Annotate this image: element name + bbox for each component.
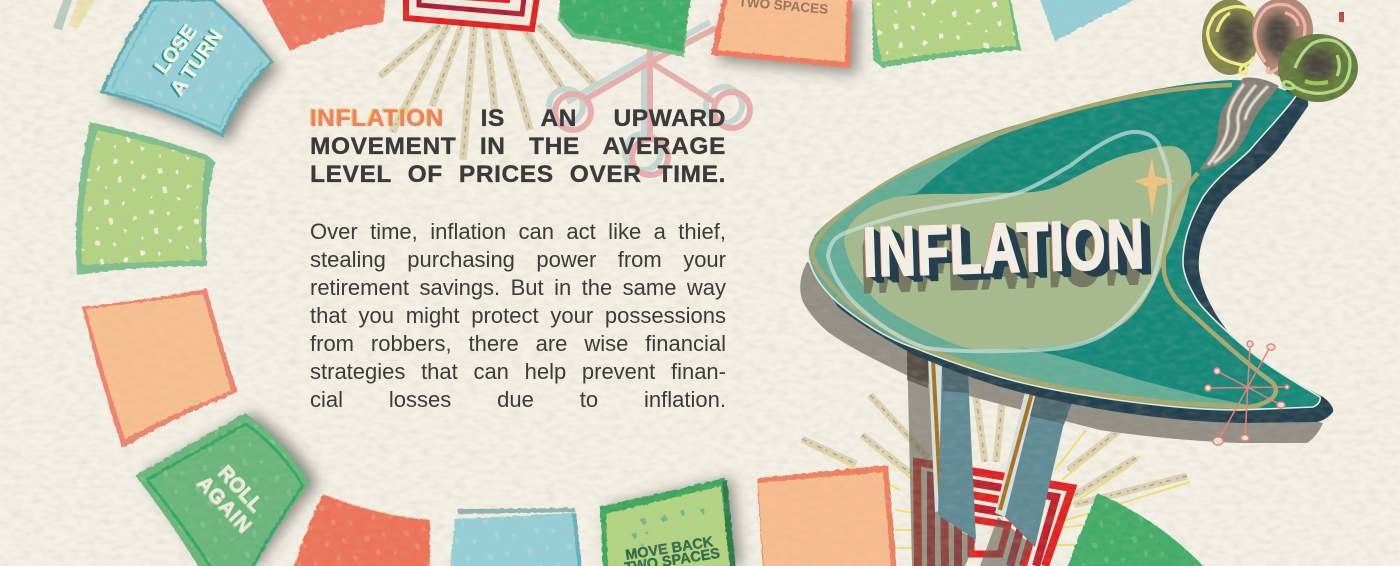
sign shadow	[800, 262, 1323, 443]
tile: light green top	[872, 0, 1021, 68]
heading text: INFLATION IS AN UPWARD	[310, 105, 726, 132]
orange star	[1134, 157, 1175, 217]
body text: from robbers, there are wise financial	[310, 331, 726, 356]
body text: retirement savings. But in the same way	[310, 275, 726, 300]
label: move back two spaces: MOVE BACK	[624, 534, 715, 564]
top red concentric frame	[406, 0, 538, 29]
pale green blob	[844, 146, 1191, 350]
top sunburst rays	[380, 25, 596, 160]
body text: stealing purchasing power from your	[310, 247, 726, 272]
tile: red top	[260, 0, 385, 51]
body text: that you might protect your possessions	[310, 303, 726, 328]
label: roll again: AGAIN	[193, 472, 256, 538]
tile: green top	[558, 0, 691, 57]
neon sign	[800, 0, 1358, 566]
bottom sunburst rays	[802, 375, 1190, 548]
tile: lose a turn	[102, 0, 279, 142]
sign lettering: INFLATION	[862, 205, 1146, 291]
neon wisp	[1200, 77, 1279, 170]
sign back edge	[830, 88, 1333, 423]
label: lose a turn: LOSE	[151, 21, 201, 78]
white rim	[808, 96, 1320, 410]
atomic star decoration behind the text	[549, 22, 750, 175]
tile: light green left	[76, 122, 215, 275]
top-left tile fragment	[53, 0, 95, 30]
tile: peach left	[82, 289, 238, 448]
heading text: LEVEL OF PRICES OVER TIME.	[310, 161, 726, 188]
neon balloon: yellow	[1202, 0, 1258, 75]
right post	[995, 388, 1072, 547]
gold line	[812, 85, 1276, 407]
heading text	[310, 105, 726, 188]
tile: blue bottom	[450, 508, 582, 566]
tile: two spaces	[711, 0, 859, 74]
light teal band	[808, 124, 1264, 410]
sign face	[808, 80, 1320, 410]
tile: green bottom right	[1066, 493, 1206, 566]
tile: blue top	[1039, 0, 1142, 41]
tile: red bottom	[293, 494, 430, 566]
tile: peach bottom	[757, 465, 897, 566]
small red mark	[1339, 12, 1344, 22]
heading text: MOVEMENT IN THE AVERAGE	[310, 133, 726, 160]
body text	[310, 219, 726, 412]
neon balloon: pink	[1252, 0, 1313, 78]
tile: move back two spaces	[600, 478, 742, 566]
atomic starburst	[1205, 341, 1289, 445]
body text: cial losses due to inflation.	[310, 387, 726, 412]
tile: roll again	[135, 413, 318, 566]
bottom red concentric frame	[917, 462, 1072, 566]
body text: strategies that can help prevent finan-	[310, 359, 726, 384]
pale neon outline	[828, 132, 1170, 351]
body text: Over time, inflation can act like a thief,	[310, 219, 726, 244]
label: lose a turn: A TURN	[167, 26, 228, 100]
post shadows	[907, 345, 1032, 566]
neon balloon: green	[1278, 34, 1358, 102]
label: roll again: ROLL	[214, 461, 267, 516]
left post	[928, 355, 976, 540]
